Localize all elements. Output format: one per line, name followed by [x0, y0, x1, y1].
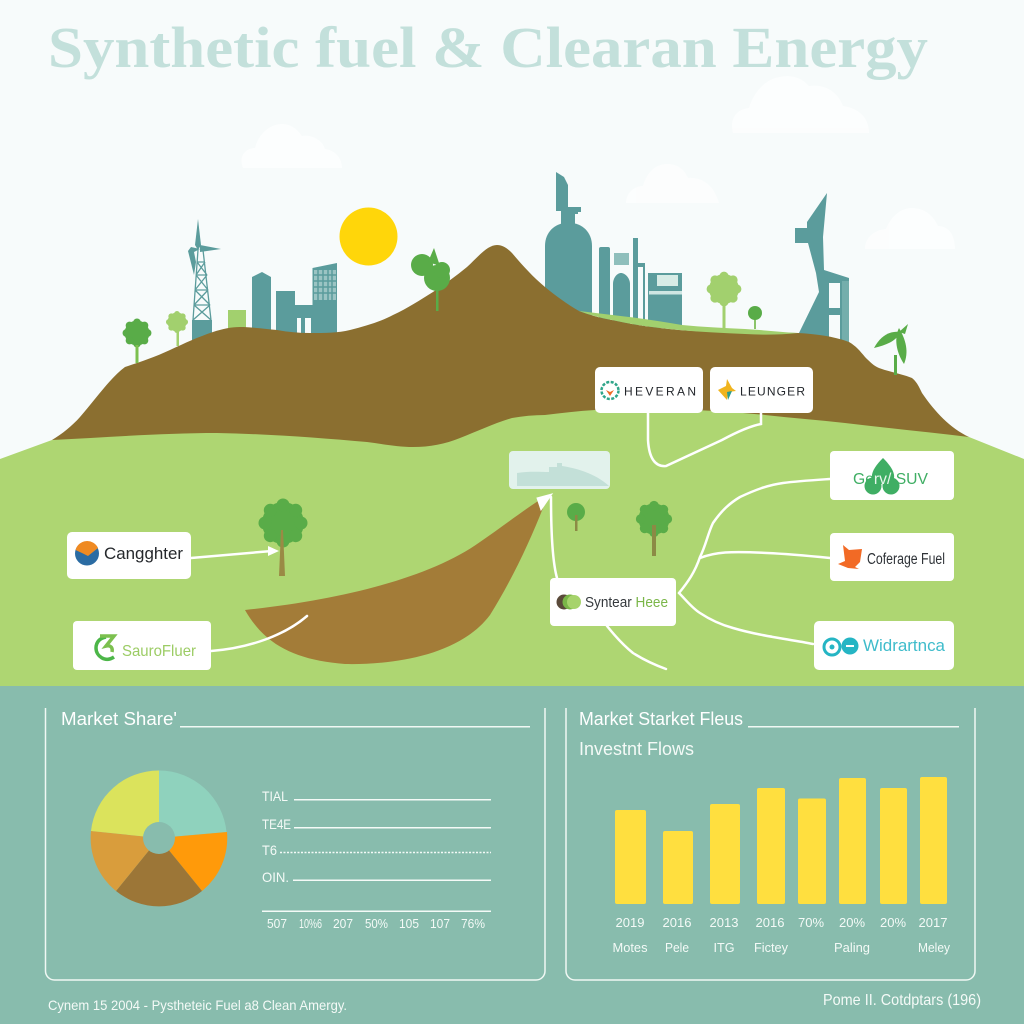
bar labels: 2016 — [756, 915, 784, 930]
logo — [75, 541, 99, 566]
connector: Synthear lower — [607, 626, 666, 669]
legend: 76% — [461, 916, 485, 931]
trees on the ridge — [123, 248, 908, 375]
label: HEVERAN — [624, 384, 696, 398]
glass panel — [509, 451, 610, 489]
icon: wind turbine — [188, 219, 221, 345]
legend: OIN. — [262, 869, 289, 885]
card: Synthear Heee — [550, 578, 676, 626]
bar labels: Pele — [665, 940, 689, 955]
pie chart — [91, 770, 227, 906]
panel frame — [46, 708, 545, 980]
brown wedge — [245, 495, 548, 664]
legend — [262, 788, 491, 931]
tree — [123, 319, 151, 363]
label: Cangghter — [104, 544, 183, 563]
logo — [824, 638, 858, 655]
bar labels: 2013 — [710, 915, 738, 930]
legend: TIAL — [262, 788, 288, 804]
brown hill — [52, 245, 969, 450]
card: Cangghter — [67, 532, 191, 579]
bar labels: ITG — [714, 940, 734, 955]
sun — [340, 208, 398, 266]
icon: refinery tanks — [545, 172, 682, 330]
card: Heveran — [595, 367, 703, 413]
logo — [602, 382, 618, 399]
legend: TE4E — [262, 816, 291, 832]
logo — [864, 458, 900, 494]
legend: 50% — [365, 916, 388, 931]
heading: Market Share' — [61, 708, 177, 729]
bar labels: 70% — [798, 915, 824, 930]
legend: 207 — [333, 916, 353, 931]
bar labels: 20% — [839, 915, 865, 930]
logo — [838, 545, 862, 569]
connector: Cangghter to tree — [191, 546, 279, 558]
panel: market share — [46, 708, 545, 980]
label: Gerv/ SUV — [853, 471, 928, 488]
heading: Market Starket Fleus — [579, 708, 743, 729]
label: Coferage Fuel — [867, 551, 945, 568]
label: LEUNGER — [740, 384, 805, 398]
bar labels: 2017 — [919, 915, 947, 930]
bar labels: Paling — [834, 940, 870, 955]
card: SauroFluer — [73, 621, 211, 670]
tree — [748, 306, 762, 329]
connector: Heveran — [648, 413, 761, 466]
teal dashboard band — [0, 686, 1024, 1024]
tree — [567, 503, 585, 531]
connector: Coferage — [700, 552, 830, 558]
title: Synthetic fuel & Clearan Energy — [48, 15, 928, 80]
label: SauroFluer — [122, 643, 197, 660]
clouds — [241, 76, 955, 249]
subheading: Investnt Flows — [579, 738, 694, 759]
tree — [636, 501, 672, 556]
connector: Synthear to glass panel — [537, 494, 557, 578]
logo — [96, 636, 114, 659]
legend: 507 — [267, 916, 287, 931]
label: Syntear Heee — [585, 594, 668, 611]
connector: SauroFluer to wedge — [211, 616, 307, 651]
panel: investment flows — [566, 708, 975, 980]
card: Widrartnca — [814, 621, 954, 670]
connector: Widrartnca — [679, 593, 813, 644]
legend: 105 — [399, 916, 419, 931]
green ledge — [579, 311, 798, 335]
legend: 107 — [430, 916, 450, 931]
legend: T6 — [262, 842, 277, 858]
bar labels: Motes — [612, 940, 648, 955]
green meadow — [0, 409, 1024, 690]
tree — [707, 272, 741, 329]
tree — [166, 311, 188, 346]
bar labels — [612, 915, 950, 955]
meadow trees — [258, 498, 672, 576]
bar labels: Fictey — [754, 940, 788, 955]
connector: GS — [679, 479, 830, 593]
legend: 10%6 — [299, 916, 322, 931]
tree — [258, 498, 308, 576]
icon: city buildings — [228, 263, 337, 339]
card: Coferage Fuel — [830, 533, 954, 581]
icon: tall turbine tower — [795, 193, 849, 345]
footer left: Cynem 15 2004 - Pystheteic Fuel a8 Clean Amergy. — [48, 997, 347, 1013]
bar labels: 2019 — [616, 915, 644, 930]
logo — [556, 594, 581, 610]
footer right: Pome II. Cotdptars (196) — [823, 992, 981, 1009]
connectors — [191, 413, 830, 669]
tree — [411, 248, 450, 311]
card: GS — [830, 451, 954, 500]
bar labels: 2016 — [663, 915, 691, 930]
bar labels: 20% — [880, 915, 906, 930]
label: Widrartnca — [863, 637, 946, 655]
sprout — [874, 324, 908, 375]
bar chart — [615, 777, 947, 904]
panel frame — [566, 708, 975, 980]
card: Leunger — [710, 367, 813, 413]
logo — [718, 379, 736, 400]
bar labels: Meley — [918, 940, 950, 955]
